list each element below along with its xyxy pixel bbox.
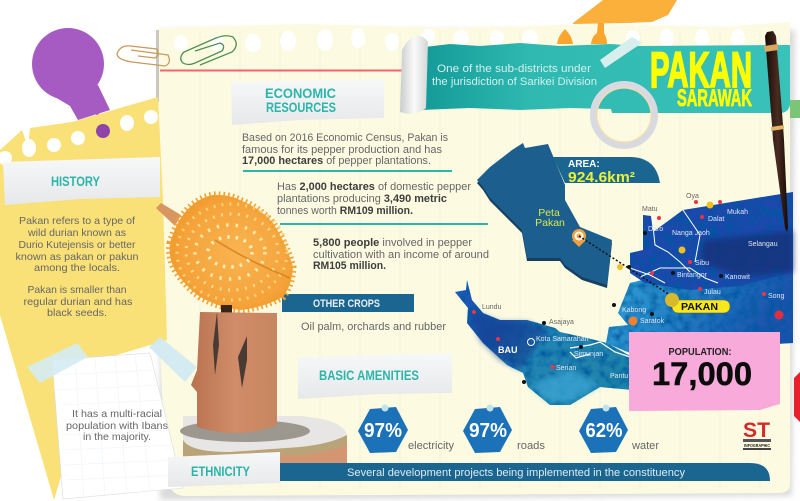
map place labels and markers: Matu (642, 206, 658, 213)
torn banner (420, 37, 790, 113)
banner subtitle: One of the sub-districts under (437, 63, 591, 75)
logo: ST infographic: ST (743, 419, 770, 442)
decorative orange tag (573, 0, 677, 24)
title: Pakan Sarawak (650, 42, 752, 112)
map place labels and markers: Nanga Jaoh (672, 230, 710, 237)
ethnicity grid note: It has a multi-racial (72, 408, 162, 420)
text: history: regular durian and has (24, 296, 132, 308)
ethnicity grid note (27, 337, 197, 499)
area map: Peta Pakan: Peta (538, 207, 560, 219)
title: Pakan Sarawak: SARAWAK (677, 85, 752, 112)
text: history: black seeds. (47, 307, 107, 319)
curled paper corner (400, 35, 428, 114)
text: pepper plantations (242, 132, 448, 167)
text: pepper plantations: Based on 2016 Economic Census, Pakan is (242, 132, 448, 144)
text: people in cultivation (313, 237, 489, 272)
callout: population note (628, 310, 784, 411)
map place labels and markers: Lundu (482, 304, 502, 311)
grey tape ring (594, 84, 654, 146)
fountain pen (764, 31, 788, 232)
map: Sarawak west (455, 280, 632, 405)
heading: other crops (282, 294, 414, 312)
text: history (16, 215, 139, 319)
area map: Peta Pakan: AREA: (568, 159, 600, 170)
area map: Peta Pakan (477, 143, 660, 288)
map place labels and markers: Serian (556, 365, 576, 372)
yellow history paper (0, 97, 167, 500)
bottom development bar: Several development projects being implemented in the constituency (347, 467, 685, 479)
area map: Peta Pakan: 924.6km² (568, 170, 635, 186)
area map: Peta Pakan: Pakan (535, 217, 565, 229)
map place labels and markers: Simunjan (574, 351, 603, 358)
heading: basic amenities: BASIC AMENITIES (319, 367, 419, 383)
stat: roads: roads (517, 440, 545, 452)
text: history: known as pakan or pakun (16, 251, 139, 263)
stat: electricity (358, 404, 455, 453)
ethnicity grid note: in the majority. (83, 431, 151, 443)
map place labels and markers: Daro (648, 226, 663, 233)
planter base (180, 416, 347, 472)
text: pepper plantations: 17,000 hectares of pepper plantations. (242, 155, 431, 167)
heading: history (3, 157, 160, 205)
durian stem (156, 203, 181, 226)
text: history: Pakan is smaller than (28, 284, 127, 296)
text: pepper plantations: famous for its pepper production and has (242, 144, 442, 156)
stat: electricity: 97% (364, 420, 402, 442)
heading: other crops: OTHER CROPS (313, 298, 380, 310)
map place labels and markers: Mukah (727, 209, 748, 216)
map place labels and markers: Pantu (610, 373, 628, 380)
tape on banner (600, 37, 642, 68)
map place labels and markers: Kanowit (725, 274, 750, 281)
stat: water: 62% (586, 420, 623, 442)
heading: economic resources: ECONOMIC (265, 85, 336, 101)
text: domestic pepper: tonnes worth RM109 million. (277, 205, 413, 217)
text: domestic pepper: Has 2,000 hectares of domestic pepper (277, 181, 471, 193)
map place labels and markers: Dalat (708, 216, 724, 223)
durian monument stump (191, 312, 277, 433)
durian illustration (170, 195, 293, 314)
map: Sarawak east (606, 192, 793, 353)
paper clips (117, 36, 236, 66)
text: history: Durio Kutejensis or better (18, 239, 136, 251)
logo: ST infographic: INFOGRAPHIC (744, 443, 771, 448)
stat: water: water (631, 440, 659, 452)
callout: population note: POPULATION: (668, 346, 732, 358)
map place labels and markers: Kota Samarahan (536, 336, 589, 343)
text: people in cultivation: 5,800 people involved in pepper (313, 237, 472, 249)
heading: basic amenities (298, 353, 452, 399)
map place labels and markers: Asajaya (549, 319, 574, 326)
callout: Pakan pin: PAKAN (681, 302, 718, 313)
icon: location pin (572, 229, 586, 247)
text: other crops: Oil palm, orchards and rubber (301, 321, 446, 333)
main notebook paper (156, 22, 800, 500)
text: people in cultivation: RM105 million. (313, 260, 386, 272)
punched holes along the notebook top (174, 23, 745, 52)
text: history: Pakan refers to a type of (19, 215, 135, 227)
map place labels and markers: Song (768, 293, 784, 300)
purple map pin tag (32, 28, 110, 126)
map place labels and markers: Sibu (695, 260, 709, 267)
callout: population note: 17,000 (652, 356, 752, 392)
map place labels and markers: Bintangor (677, 272, 708, 279)
stat: roads: 97% (469, 420, 507, 442)
map place labels and markers: Saratok (640, 318, 665, 325)
text: people in cultivation: cultivation with an income of around (313, 249, 489, 261)
map place labels and markers: Oya (686, 193, 699, 200)
map place labels and markers (472, 193, 784, 384)
banner subtitle: the jurisdiction of Sarikei Division (432, 76, 597, 88)
heading: history: HISTORY (51, 174, 100, 189)
stat: electricity: electricity (408, 440, 455, 452)
map place labels and markers: Julau (704, 289, 721, 296)
ethnicity grid note: population with Ibans (66, 420, 168, 432)
text: domestic pepper: plantations producing 3,490 metric (277, 193, 447, 205)
heading: ethnicity: ETHNICITY (191, 463, 251, 479)
stat: roads (463, 404, 545, 453)
bottom development bar (280, 463, 770, 481)
heading: economic resources: RESOURCES (266, 99, 336, 115)
heading: ethnicity (168, 452, 280, 487)
banner subtitle (432, 63, 597, 88)
map place labels and markers: Selangau (748, 241, 778, 248)
callout: Pakan pin (665, 293, 730, 313)
heading: economic resources (231, 79, 384, 125)
text: domestic pepper (277, 181, 471, 217)
map place labels and markers: BAU (498, 345, 518, 355)
text: history: among the locals. (34, 262, 120, 274)
map place labels and markers: Kabong (622, 307, 646, 314)
stat: water (579, 404, 659, 453)
text: history: wild durian known as (27, 227, 126, 239)
